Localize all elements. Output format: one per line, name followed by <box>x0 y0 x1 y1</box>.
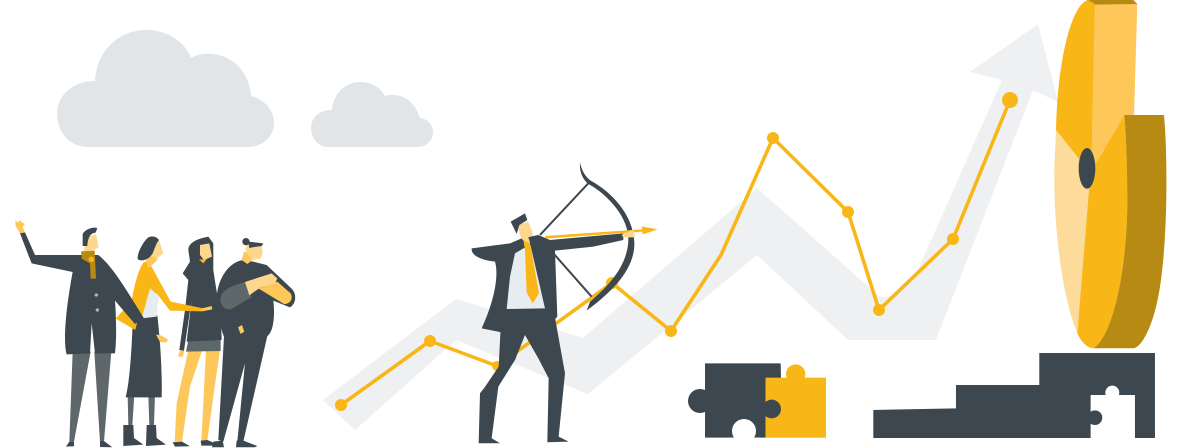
grey growth arrow <box>323 24 1058 430</box>
person: man checking watch <box>212 238 295 447</box>
wheel hub <box>1079 148 1095 189</box>
yellow puzzle piece <box>730 364 826 448</box>
archer figure <box>472 213 635 443</box>
big cloud <box>57 30 274 147</box>
stair steps with puzzle gap <box>873 353 1155 438</box>
person: woman with long hair <box>173 237 222 447</box>
yellow target wheel <box>1054 0 1166 348</box>
jigsaw pieces <box>688 363 826 448</box>
yellow line chart <box>335 92 1018 411</box>
archer businessman <box>472 163 658 443</box>
icon: bow and string <box>540 163 634 311</box>
person: man with scarf <box>15 220 144 447</box>
small cloud <box>311 82 433 147</box>
dark puzzle piece <box>688 363 781 438</box>
group of four people <box>15 220 295 447</box>
icon: arrow <box>545 226 658 239</box>
person: woman in yellow top <box>116 237 212 446</box>
